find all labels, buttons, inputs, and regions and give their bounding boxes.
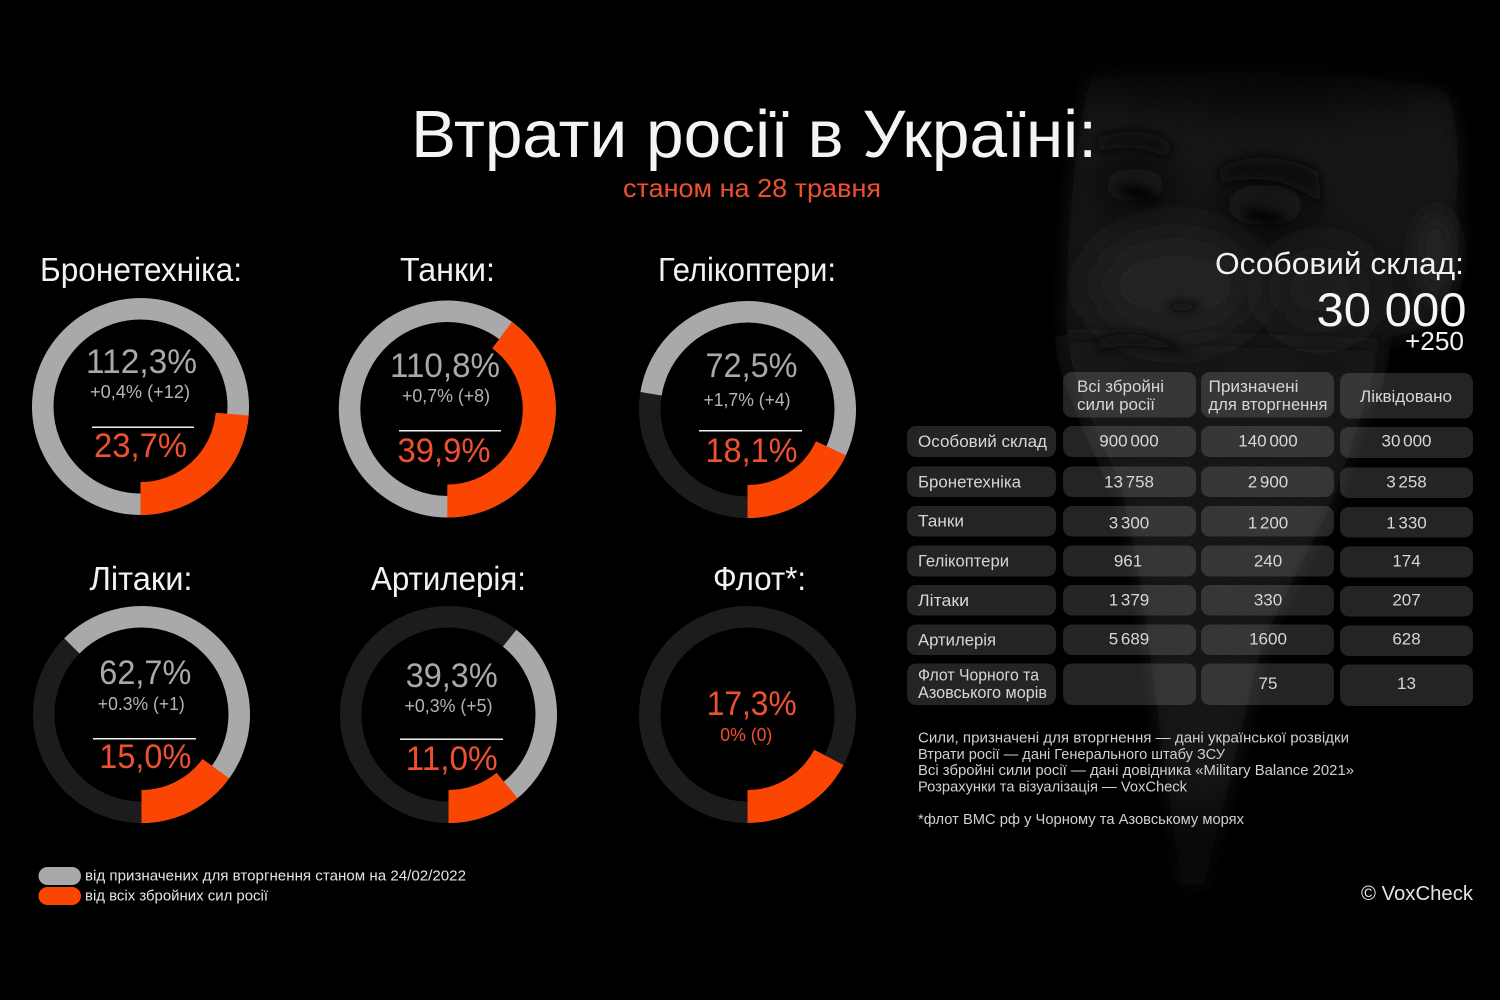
- panel: Артилерія: [351, 560, 546, 812]
- table row: Літаки: 207: [1392, 590, 1421, 610]
- legend swatch: grey: [38, 867, 81, 885]
- panel: Літаки: [44, 560, 239, 812]
- heading: Танки:: [400, 251, 495, 288]
- donut chart: [43, 309, 238, 504]
- panel: Бронетехніка: [40, 251, 242, 504]
- table row: Літаки: [907, 585, 1473, 616]
- table row: Флот: Азовського морів: [918, 683, 1047, 702]
- background photo: dimmed portrait: [1060, 32, 1480, 900]
- table row: Танки: Танки: [918, 512, 964, 530]
- source notes: Втрати росії — дані Генерального штабу ЗСУ: [918, 747, 1226, 763]
- table row: Артилерія: Артилерія: [918, 630, 996, 650]
- heading: Артилерія:: [371, 560, 526, 597]
- value: 112,3%: [86, 343, 197, 381]
- legend text: orange: від всіх збройних сил росії: [85, 888, 268, 904]
- change: 0% (0): [720, 725, 772, 745]
- donut chart: [650, 617, 845, 812]
- table row: Артилерія: [907, 624, 1473, 656]
- subtitle: станом на 28 травня: [623, 173, 881, 203]
- value: 110,8%: [390, 347, 500, 385]
- table row: Гелікоптери: 240: [1254, 552, 1282, 570]
- source notes: Розрахунки та візуалізація — VoxCheck: [918, 780, 1188, 796]
- donut chart: [44, 617, 239, 812]
- donut chart: [350, 311, 545, 507]
- table row: Гелікоптери: 174: [1392, 552, 1421, 570]
- panel: Танки: [350, 251, 545, 507]
- heading: Флот*:: [713, 560, 806, 597]
- value: 39,3%: [406, 657, 498, 695]
- table row: Гелікоптери: 961: [1114, 552, 1142, 570]
- table row: Особовий склад: 30 000: [1382, 432, 1432, 450]
- table row: Артилерія: 628: [1392, 630, 1421, 648]
- value: 62,7%: [99, 654, 191, 692]
- donut chart: [351, 617, 546, 812]
- table row: Особовий склад: 900 000: [1099, 432, 1159, 450]
- change: +0.3% (+1): [98, 694, 185, 714]
- share: 11,0%: [406, 740, 498, 778]
- table header: Ліквідовано: [1360, 387, 1452, 406]
- share: 23,7%: [94, 427, 187, 465]
- change: +0,3% (+5): [404, 696, 492, 716]
- table row: Бронетехніка: Бронетехніка: [918, 472, 1022, 492]
- personnel number: 30 000: [1316, 283, 1466, 336]
- table row: Флот: [907, 664, 1473, 706]
- source notes: *флот ВМС рф у Чорному та Азовському морях: [918, 812, 1245, 828]
- table row: Бронетехніка: 3 258: [1386, 472, 1427, 492]
- table header: сили росії: [1077, 395, 1155, 414]
- heading: Гелікоптери:: [658, 251, 836, 288]
- table row: Особовий склад: Особовий склад: [918, 432, 1047, 451]
- legend swatch: orange: [38, 887, 81, 905]
- table row: Літаки: Літаки: [918, 591, 969, 610]
- share: 18,1%: [706, 432, 798, 470]
- title: Втрати росії в Україні:: [411, 97, 1097, 172]
- share: 15,0%: [99, 738, 191, 776]
- personnel headline: [1215, 246, 1466, 356]
- table row: Танки: [907, 506, 1473, 538]
- panel: Гелікоптери: [650, 251, 845, 507]
- table row: Літаки: 1 379: [1109, 590, 1149, 610]
- source notes: Всі збройні сили росії — дані довідника «Military Balance 2021»: [918, 763, 1354, 779]
- table row: Бронетехніка: 2 900: [1248, 472, 1288, 492]
- share: 39,9%: [398, 432, 490, 470]
- legend: [38, 867, 466, 905]
- table row: Танки: 1 200: [1248, 514, 1288, 532]
- table header: Призначені: [1208, 377, 1298, 396]
- source notes: Сили, призначені для вторгнення — дані української розвідки: [918, 730, 1349, 746]
- heading: Літаки:: [90, 560, 192, 597]
- legend text: grey: від призначених для вторгнення станом на 24/02/2022: [85, 868, 466, 884]
- table row: Флот: 13: [1397, 674, 1416, 693]
- change: +0,4% (+12): [90, 382, 190, 402]
- source notes: [918, 730, 1354, 828]
- table header: Всі збройні: [1077, 377, 1164, 396]
- table row: Артилерія: 1600: [1249, 630, 1287, 648]
- table row: Флот: Флот Чорного та: [918, 666, 1040, 684]
- value: 17,3%: [707, 685, 797, 723]
- change: +0,7% (+8): [402, 386, 490, 406]
- table: [907, 372, 1473, 706]
- personnel change: +250: [1405, 326, 1464, 356]
- table row: Гелікоптери: [907, 546, 1473, 578]
- table row: Особовий склад: 140 000: [1238, 432, 1298, 450]
- personnel label: Особовий склад:: [1215, 246, 1464, 281]
- heading: Бронетехніка:: [40, 251, 242, 288]
- table row: Гелікоптери: Гелікоптери: [918, 552, 1009, 570]
- table row: Бронетехніка: 13 758: [1104, 472, 1154, 492]
- table header: для вторгнення: [1208, 395, 1328, 414]
- change: +1,7% (+4): [704, 390, 790, 410]
- credit: © VoxCheck: [1361, 883, 1474, 905]
- table header: [1063, 372, 1473, 418]
- table row: Флот: 75: [1259, 674, 1277, 693]
- table row: Артилерія: 5 689: [1109, 630, 1149, 648]
- panel: Флот: [650, 560, 845, 812]
- table row: Танки: 3 300: [1109, 514, 1149, 532]
- table row: Літаки: 330: [1254, 590, 1282, 610]
- table row: Бронетехніка: [907, 466, 1473, 498]
- value: 72,5%: [706, 347, 798, 385]
- donut chart: [650, 312, 845, 507]
- table row: Танки: 1 330: [1386, 514, 1427, 532]
- table row: Особовий склад: [907, 426, 1473, 458]
